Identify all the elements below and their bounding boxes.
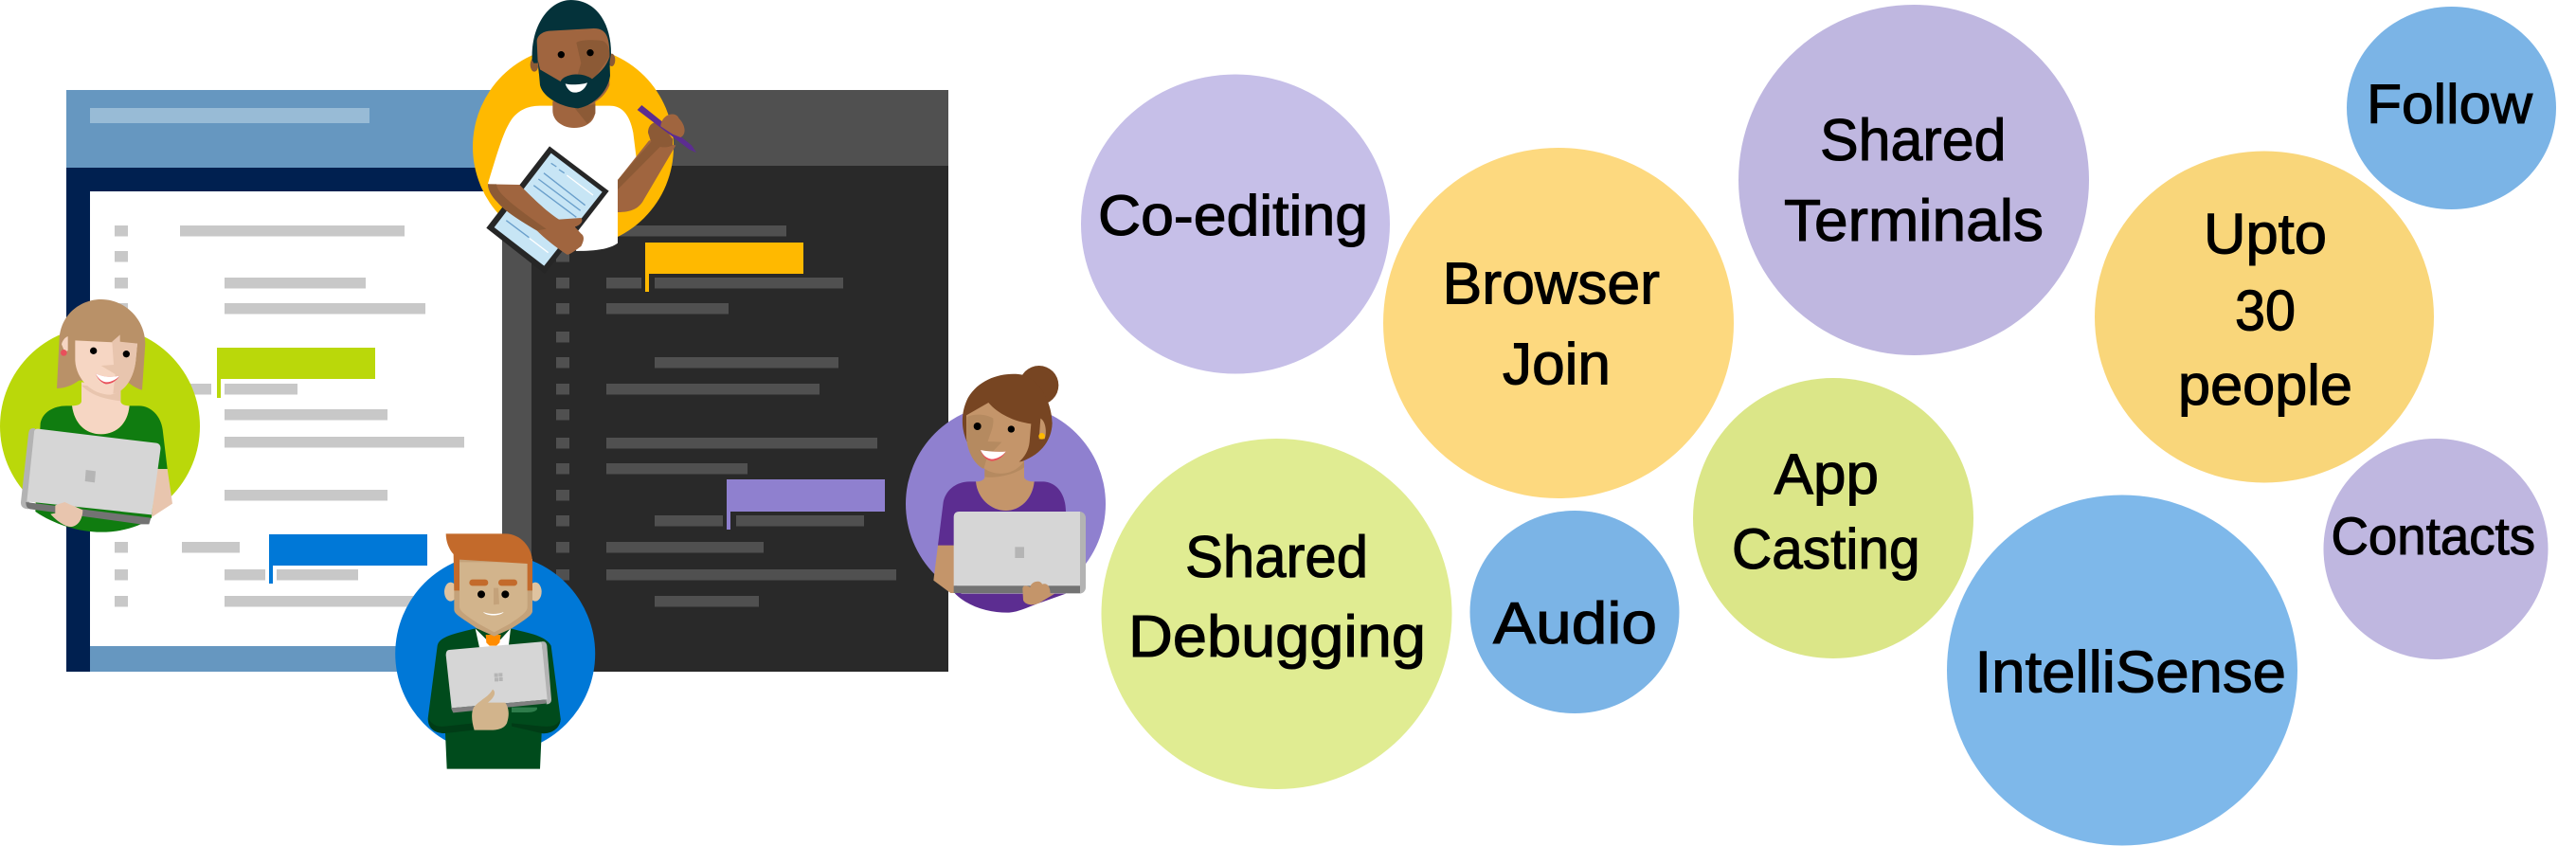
panel: light code editor bbox=[66, 90, 512, 672]
dark editor code lines bbox=[556, 225, 896, 606]
bubble: Shared Terminals bbox=[1738, 5, 2089, 355]
bubble: Shared Debugging bbox=[1101, 439, 1451, 789]
bubble: IntelliSense: IntelliSense bbox=[1974, 640, 2286, 705]
bubble: Contacts: Contacts bbox=[2331, 506, 2535, 566]
blue cursor flag bbox=[269, 534, 427, 584]
panel: dark code editor bbox=[502, 90, 948, 672]
person: man in green jacket on blue circle bbox=[395, 533, 595, 769]
green cursor flag bbox=[217, 348, 375, 398]
bubble: Follow bbox=[2347, 7, 2556, 209]
yellow cursor flag bbox=[645, 243, 803, 292]
person: man with tablet on yellow circle bbox=[473, 0, 696, 274]
bubble: Audio bbox=[1470, 511, 1679, 713]
bubble: Browser Join: Browser bbox=[1442, 252, 1660, 316]
bubble: Co-editing: Co-editing bbox=[1098, 184, 1368, 247]
bubble: IntelliSense bbox=[1947, 495, 2297, 845]
bubble: Upto 30 people bbox=[2095, 152, 2434, 483]
bubble: Shared Debugging: Shared bbox=[1185, 525, 1368, 590]
bubble: App Casting: App bbox=[1774, 442, 1879, 506]
bubble: Contacts bbox=[2323, 439, 2549, 659]
person: woman with bun on purple circle bbox=[906, 366, 1106, 613]
light editor code lines bbox=[115, 225, 464, 606]
bubble: Shared Terminals: Terminals bbox=[1784, 189, 2044, 254]
bubble: App Casting: Casting bbox=[1732, 517, 1919, 581]
bubble: Shared Terminals: Shared bbox=[1820, 108, 2007, 173]
bubble: Upto 30 people: 30 bbox=[2235, 279, 2296, 343]
bubble: Browser Join: Join bbox=[1503, 332, 1611, 398]
bubble: Shared Debugging: Debugging bbox=[1128, 604, 1426, 670]
bubble: Browser Join bbox=[1383, 148, 1734, 498]
bubble: Audio: Audio bbox=[1493, 591, 1657, 657]
person: woman with laptop on green circle bbox=[0, 299, 200, 532]
bubble: Co-editing bbox=[1081, 74, 1390, 373]
bubble: App Casting bbox=[1693, 378, 1973, 658]
bubble: Follow: Follow bbox=[2367, 74, 2533, 135]
purple cursor flag bbox=[727, 479, 885, 530]
bubble: Upto 30 people: people bbox=[2178, 353, 2352, 417]
bubble: Upto 30 people: Upto bbox=[2204, 203, 2327, 265]
